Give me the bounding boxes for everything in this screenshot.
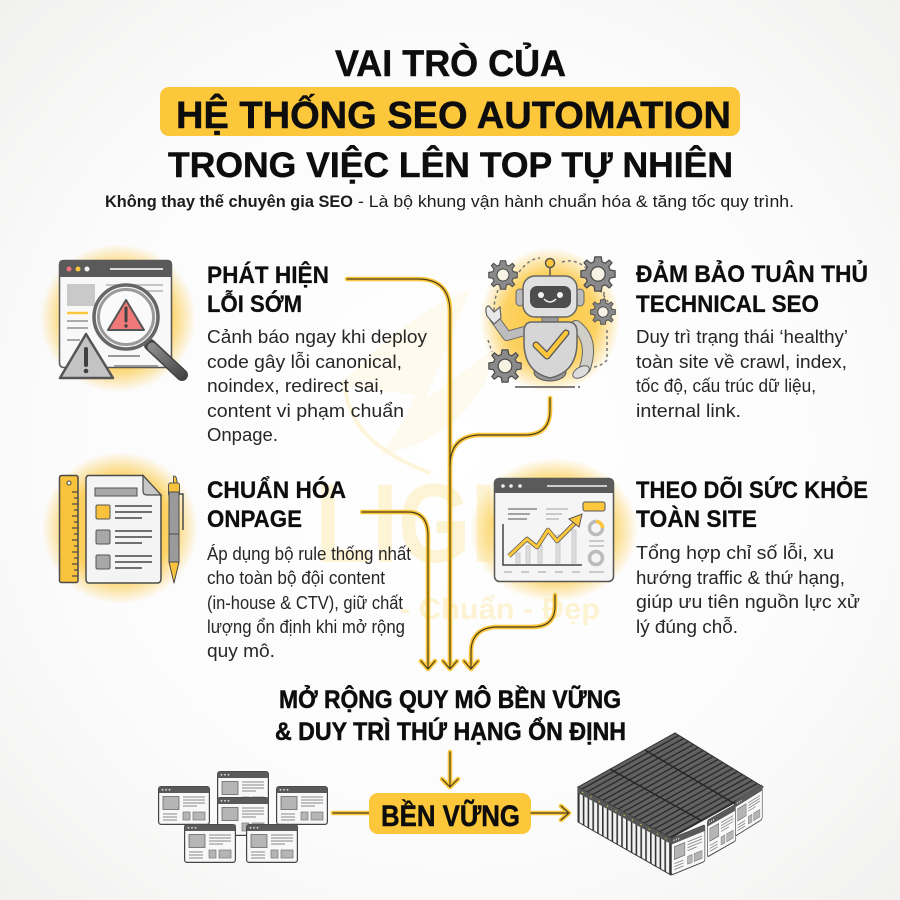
arrow: down to bền vững: [442, 752, 458, 787]
icon: document ruler pen: [42, 452, 198, 604]
text: chuẩn hóa onpage: quy mô.: [207, 641, 275, 661]
text: đảm bảo tuân thủ: internal link.: [636, 400, 741, 421]
heading: đảm bảo tuân thủ: [636, 259, 868, 318]
heading: phát hiện lỗi sớm: LỖI SỚM: [207, 289, 302, 318]
title: VAI TRÒ CỦA: [335, 42, 566, 84]
connector arrows: [347, 279, 555, 669]
text: phát hiện lỗi sớm: Cảnh báo ngay khi deploy: [207, 326, 428, 347]
heading: theo dõi sức khỏe: THEO DÕI SỨC KHỎE: [636, 475, 868, 504]
text: phát hiện lỗi sớm: Onpage.: [207, 424, 278, 445]
text: phát hiện lỗi sớm: [207, 326, 428, 445]
text: chuẩn hóa onpage: Áp dụng bộ rule thống nhất: [207, 544, 411, 564]
title: TRONG VIỆC LÊN TOP TỰ NHIÊN: [168, 145, 733, 185]
text: chuẩn hóa onpage: (in-house & CTV), giữ chất: [207, 593, 403, 613]
text: đảm bảo tuân thủ: tốc độ, cấu trúc dữ liệu,: [636, 375, 816, 396]
badge: bền vững: BỀN VỮNG: [381, 799, 520, 833]
title: [160, 42, 740, 185]
icon: isometric stack of web pages: [578, 733, 763, 875]
watermark logo: LIGHT: [315, 461, 595, 586]
outcome heading: [275, 684, 626, 746]
text: chuẩn hóa onpage: lượng ổn định khi mở rộng: [207, 617, 405, 637]
text: đảm bảo tuân thủ: Duy trì trạng thái ‘healthy’: [636, 326, 848, 347]
text: phát hiện lỗi sớm: code gây lỗi canonical,: [207, 351, 402, 372]
subtitle: [105, 193, 794, 211]
watermark logo: [315, 290, 600, 626]
text: theo dõi sức khỏe: Tổng hợp chỉ số lỗi, xu: [636, 542, 834, 563]
text: đảm bảo tuân thủ: [636, 326, 848, 421]
text: đảm bảo tuân thủ: toàn site về crawl, index,: [636, 351, 847, 372]
heading: phát hiện lỗi sớm: PHÁT HIỆN: [207, 261, 329, 289]
text: theo dõi sức khỏe: hướng traffic & thứ hạng,: [636, 567, 845, 588]
icon: few web pages: [159, 772, 327, 862]
heading: theo dõi sức khỏe: [636, 475, 868, 533]
arrow: bền vững to many pages: [531, 806, 569, 820]
outcome heading: & DUY TRÌ THỨ HẠNG ỔN ĐỊNH: [275, 716, 626, 746]
heading: theo dõi sức khỏe: TOÀN SITE: [636, 505, 757, 533]
watermark logo: - Chuẩn - Đẹp: [400, 593, 600, 626]
text: chuẩn hóa onpage: [207, 544, 411, 661]
heading: chuẩn hóa onpage: [207, 476, 346, 533]
text: theo dõi sức khỏe: lý đúng chỗ.: [636, 616, 738, 637]
heading: chuẩn hóa onpage: CHUẨN HÓA: [207, 476, 346, 504]
subtitle: - Là bộ khung vận hành chuẩn hóa & tăng tốc quy trình.: [358, 193, 794, 211]
text: phát hiện lỗi sớm: noindex, redirect sai,: [207, 375, 384, 396]
heading: chuẩn hóa onpage: ONPAGE: [207, 506, 302, 533]
arrow: pages to bền vững: [333, 811, 369, 815]
title highlight pill: [160, 87, 740, 136]
heading: đảm bảo tuân thủ: TECHNICAL SEO: [636, 291, 819, 318]
icon: dashboard chart: [470, 458, 638, 602]
text: theo dõi sức khỏe: giúp ưu tiên nguồn lực xử: [636, 591, 860, 612]
text: phát hiện lỗi sớm: content vi phạm chuẩn: [207, 400, 404, 421]
heading: phát hiện lỗi sớm: [207, 261, 329, 318]
icon: browser error magnifier: [40, 244, 196, 392]
icon: robot: [480, 248, 620, 392]
subtitle: Không thay thế chuyên gia SEO: [105, 193, 353, 211]
text: theo dõi sức khỏe: [636, 542, 860, 637]
heading: đảm bảo tuân thủ: ĐẢM BẢO TUÂN THỦ: [636, 259, 868, 288]
outcome heading: MỞ RỘNG QUY MÔ BỀN VỮNG: [279, 684, 621, 714]
text: chuẩn hóa onpage: cho toàn bộ đội content: [207, 568, 385, 588]
title: HỆ THỐNG SEO AUTOMATION: [176, 92, 731, 137]
